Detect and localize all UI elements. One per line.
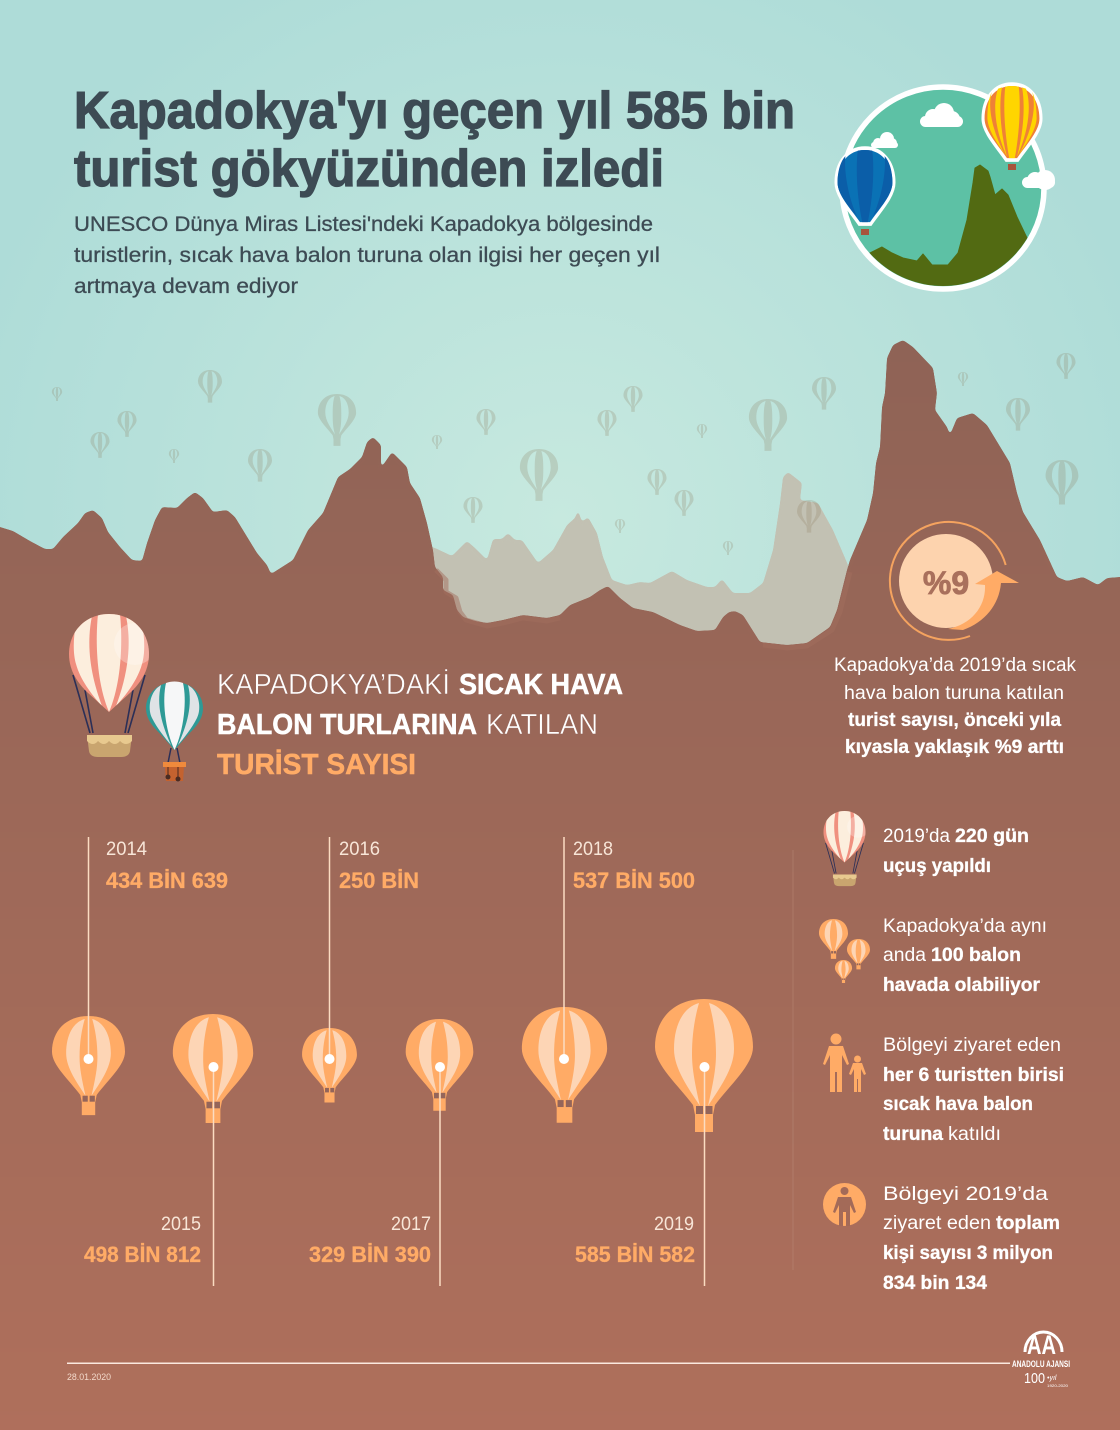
fact: total visitors: 834 bin 134 bbox=[883, 1273, 987, 1294]
logo: Anadolu Ajansı: 100 bbox=[1024, 1370, 1045, 1387]
2017: 329 BİN 390 bbox=[309, 1242, 431, 1267]
fact: simultaneous balloons: Kapadokya’da aynı bbox=[883, 916, 1047, 937]
background faint balloons bbox=[52, 353, 1078, 555]
fact: simultaneous balloons: havada olabiliyor bbox=[883, 975, 1041, 996]
fact: one in six tourists: her 6 turistten birisi bbox=[883, 1065, 1064, 1086]
icon: three balloons bbox=[819, 919, 870, 983]
fact: simultaneous balloons bbox=[819, 916, 1047, 996]
balloon over grey mountain bbox=[797, 500, 821, 533]
logo: Anadolu Ajansı bbox=[1012, 1330, 1070, 1388]
fact: total visitors: ziyaret eden bbox=[883, 1213, 991, 1234]
hero illustration: globe with balloons bbox=[838, 86, 1060, 300]
cloud large bbox=[920, 103, 963, 127]
2019 bbox=[575, 999, 753, 1286]
fact: flight days: 220 gün bbox=[955, 826, 1029, 847]
subtitle: turistlerin, sıcak hava balon turuna olan ilgisi her geçen yıl bbox=[74, 244, 660, 267]
cloud right bbox=[1022, 170, 1055, 190]
logo: Anadolu Ajansı: •yıl bbox=[1047, 1375, 1057, 1382]
icon: adult and child bbox=[823, 1034, 866, 1092]
logo: Anadolu Ajansı: AA bbox=[1027, 1330, 1056, 1360]
2015 bbox=[84, 1014, 253, 1286]
2016: 250 BİN bbox=[339, 868, 419, 893]
fact: flight days: 2019’da bbox=[883, 826, 950, 847]
hero mountain bbox=[870, 164, 1028, 286]
fact: simultaneous balloons: 100 balon bbox=[931, 945, 1021, 966]
2014: 434 BİN 639 bbox=[106, 868, 228, 893]
fact: one in six tourists: katıldı bbox=[948, 1124, 1001, 1145]
section heading: SICAK HAVA bbox=[459, 669, 623, 701]
date: 28.01.2020 bbox=[67, 1372, 111, 1382]
icon: peach balloon bbox=[69, 614, 156, 757]
foreground brown mountains bbox=[0, 340, 1120, 1430]
badge description bbox=[834, 655, 1076, 758]
2015: 498 BİN 812 bbox=[84, 1242, 201, 1267]
cloud small bbox=[871, 132, 898, 148]
title: turist gökyüzünden izledi bbox=[74, 140, 664, 198]
2017: 2017 bbox=[391, 1214, 431, 1235]
distant grey mountains bbox=[425, 472, 860, 660]
fact: total visitors: Bölgeyi 2019’da bbox=[883, 1184, 1049, 1205]
2019: 585 BİN 582 bbox=[575, 1242, 695, 1267]
title: Kapadokya'yı geçen yıl 585 bin bbox=[74, 82, 795, 140]
growth badge %9 bbox=[890, 522, 1019, 640]
2014 bbox=[52, 837, 228, 1115]
2016 bbox=[302, 837, 419, 1102]
section heading: KATILAN bbox=[486, 709, 598, 741]
icon: teal balloon bbox=[146, 682, 203, 782]
fact: one in six tourists: sıcak hava balon bbox=[883, 1094, 1033, 1115]
logo: Anadolu Ajansı: 1920-2020 bbox=[1047, 1383, 1069, 1388]
growth badge %9: %9 bbox=[923, 565, 969, 601]
badge description: hava balon turuna katılan bbox=[844, 683, 1064, 704]
2016: 2016 bbox=[339, 839, 380, 860]
title bbox=[74, 82, 795, 198]
2017 bbox=[309, 1019, 473, 1286]
2018: 537 BİN 500 bbox=[573, 868, 695, 893]
section heading bbox=[217, 668, 623, 781]
fact: one in six tourists: Bölgeyi ziyaret eden bbox=[883, 1035, 1061, 1056]
section heading: BALON TURLARINA bbox=[217, 709, 477, 741]
section heading: KAPADOKYA’DAKİ bbox=[217, 668, 450, 701]
2014: 2014 bbox=[106, 839, 147, 860]
fact: simultaneous balloons: anda bbox=[883, 945, 926, 966]
fact: total visitors: toplam bbox=[996, 1213, 1060, 1234]
badge description: turist sayısı, önceki yıla bbox=[848, 710, 1061, 731]
footer rule bbox=[67, 1362, 1010, 1364]
subtitle: UNESCO Dünya Miras Listesi'ndeki Kapadokya bölgesinde bbox=[74, 213, 653, 236]
section heading: TURİST SAYISI bbox=[217, 749, 416, 781]
icon: balloon bbox=[824, 811, 869, 886]
2018: 2018 bbox=[573, 839, 613, 860]
fact: total visitors: kişi sayısı 3 milyon bbox=[883, 1243, 1053, 1264]
badge description: kıyasla yaklaşık %9 arttı bbox=[845, 737, 1064, 758]
balloon timeline chart bbox=[52, 837, 753, 1286]
2018 bbox=[522, 837, 695, 1123]
fact: total visitors bbox=[823, 1183, 1060, 1294]
fact: one in six tourists bbox=[823, 1034, 1064, 1145]
subtitle bbox=[74, 213, 660, 298]
badge description: Kapadokya’da 2019’da sıcak bbox=[834, 655, 1076, 676]
fact: flight days bbox=[824, 811, 1029, 886]
orange balloon bbox=[985, 86, 1039, 170]
fact: flight days: uçuş yapıldı bbox=[883, 856, 991, 877]
logo: Anadolu Ajansı: ANADOLU AJANSI bbox=[1012, 1359, 1070, 1369]
fact: one in six tourists: turuna bbox=[883, 1124, 943, 1145]
icon: person in circle bbox=[823, 1183, 866, 1226]
2015: 2015 bbox=[161, 1214, 201, 1235]
subtitle: artmaya devam ediyor bbox=[74, 275, 298, 298]
2019: 2019 bbox=[654, 1214, 694, 1235]
blue balloon bbox=[838, 150, 892, 235]
